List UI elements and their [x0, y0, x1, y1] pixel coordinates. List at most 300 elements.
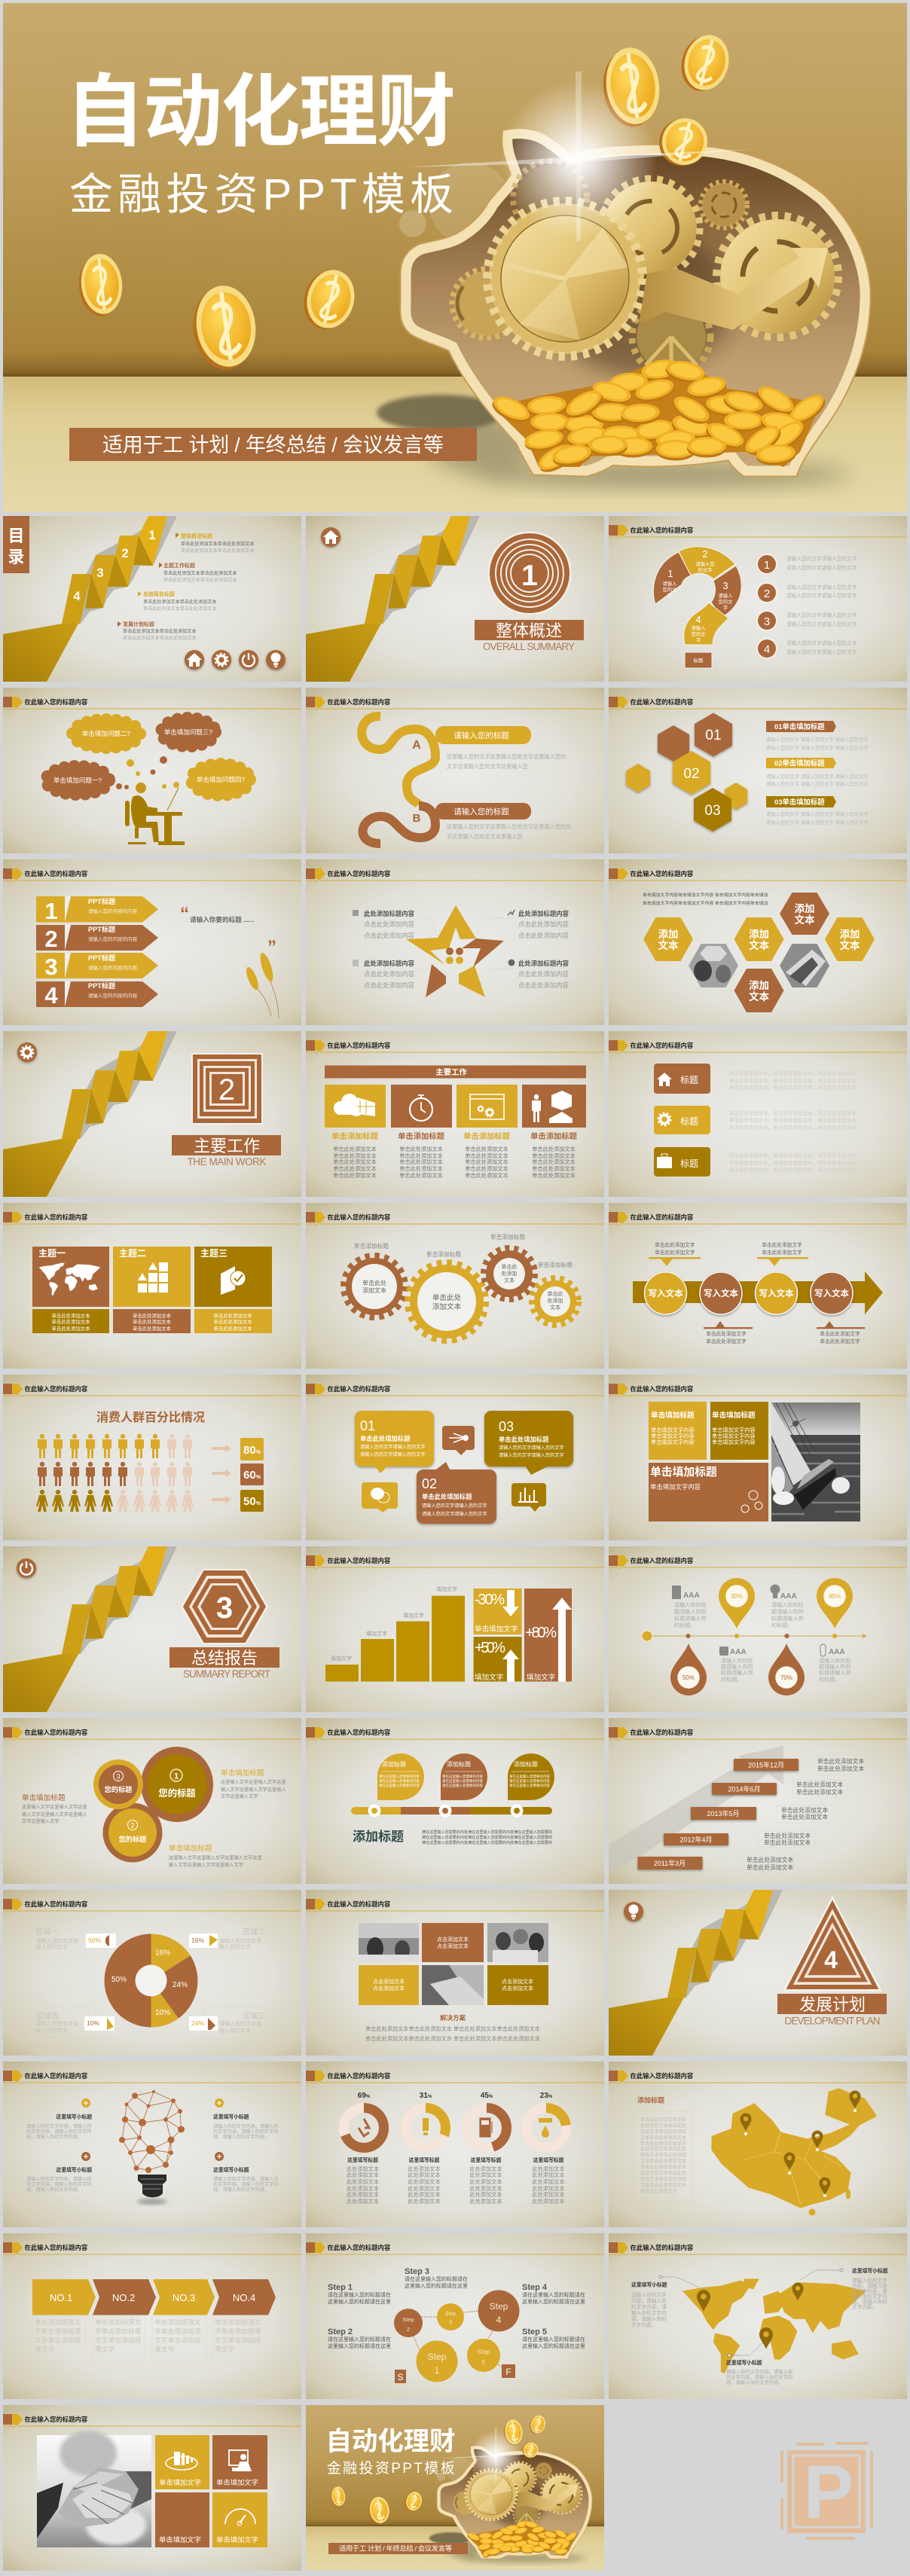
contents list: 单击此处添加文本单击此处添加文本	[181, 541, 255, 547]
panel: donut regions	[3, 1890, 301, 2056]
arrow list: 3	[44, 954, 58, 980]
tile text: 单击此处添加文本	[465, 1165, 508, 1172]
donut chart: 10%	[155, 2009, 170, 2017]
region texts: 请输入您的文字请	[36, 2020, 78, 2027]
bottom callouts: 单击此处添加文字	[820, 1330, 860, 1337]
left note: 这里填写小标题	[631, 2281, 667, 2288]
circle 3: 您的标题	[105, 1785, 132, 1793]
bubble 02: 单击此处填加标题	[422, 1493, 472, 1500]
step labels: 这里输入您的标题请在这里	[328, 2343, 391, 2349]
year notes: 单击此处添加文本	[796, 1781, 843, 1788]
tile titles: 单击添加标题	[530, 1131, 578, 1141]
solution text: 单击此处添加文本单击此处添加文本 单击此处添加文本单击此处添加文本	[365, 2035, 540, 2042]
tile text: 单击此处添加文本	[399, 1158, 443, 1165]
body text: 满在这里输入您需要的内容满在这里输入您需要的内容满在这里输入您需要的	[422, 1840, 552, 1845]
closing title: 自动化理财	[325, 2428, 455, 2456]
chevron text: 落文字	[35, 2345, 55, 2353]
solution heading: 解决方案	[440, 2014, 466, 2022]
percent cards: 24%	[191, 2019, 204, 2027]
text hexagons: 添加	[749, 980, 769, 991]
top callouts	[649, 1241, 808, 1266]
bottom note: 容。请输入你的文字内容。	[726, 2379, 783, 2385]
banner	[325, 1065, 586, 1079]
dark gold tile: 单击填加标题	[712, 1411, 756, 1420]
left items: 点击此处添加内容	[364, 932, 415, 939]
item bottom right: 请输入你的文字内容。请输入你	[213, 2176, 279, 2182]
hexagon cluster	[626, 713, 747, 832]
tile text: 单击此处添加文本	[333, 1146, 377, 1152]
AAA texts top: AAA	[780, 1592, 797, 1601]
numbered list: 请输入您的文字请输入您的文字	[786, 592, 857, 599]
region texts: 请输入您的文字请	[36, 1937, 78, 1944]
item top right	[213, 2098, 279, 2140]
panel: hexagon list: 在此输入您的标题内容	[630, 698, 694, 706]
right list: 请输入您的文字 请输入您的文字 请输入您的文字	[766, 780, 869, 787]
AAA texts top: 标题请输入你	[771, 1615, 804, 1622]
arrow list: 1	[44, 898, 58, 924]
panel: photo text tiles	[609, 1375, 907, 1540]
column text: 此处添加文本	[532, 2178, 565, 2185]
donut chart: 50%	[111, 1976, 127, 1984]
step labels: 请在这里输入您的标题请在	[522, 2291, 585, 2298]
item bottom right: 容。请输入你的文字内容。	[213, 2187, 269, 2193]
item bottom left: 容。请输入你的文字内容。	[26, 2187, 82, 2193]
percent boxes	[240, 1438, 264, 1512]
panel: section 1 overall summary	[306, 516, 604, 682]
heading: 添加标题	[353, 1830, 404, 1844]
tile: presenter: 单击填加文字	[216, 2478, 258, 2486]
nested triangle number: 4	[824, 1946, 838, 1973]
donut 31%: 31%	[420, 2092, 432, 2100]
drop dark gold	[508, 1753, 554, 1800]
english caption: OVERALL SUMMARY	[483, 641, 575, 652]
bar chart: 填加文字	[366, 1630, 387, 1637]
right items: 此处添加标题内容	[518, 960, 570, 967]
gear one: 单击此处	[362, 1279, 386, 1286]
right list: 02单击填加标题	[774, 759, 825, 767]
gear labels: 单击添加标题	[538, 1261, 573, 1268]
donut 23%: 23%	[540, 2092, 553, 2100]
panel: three buttons list	[609, 1031, 907, 1197]
chevron text: 文字单击添加段	[95, 2336, 142, 2344]
map text box: 单击此处添加文本	[640, 2188, 677, 2194]
contents tab: 目	[8, 526, 25, 545]
photo: meeting two	[487, 1923, 548, 1962]
AAA texts top: 标题请输入你	[674, 1615, 707, 1622]
right items	[508, 910, 570, 989]
bullet text: 单击此处添加文本，单击此处添加文本，单击此处添加文本	[729, 1084, 857, 1091]
theme two: 单击此处添加文本	[133, 1318, 172, 1325]
donut 69%: 69%	[358, 2092, 371, 2100]
circles: 写入文本	[759, 1288, 794, 1299]
tile: dark gold: 点击添加文本	[502, 1978, 533, 1985]
quote	[180, 904, 276, 957]
gear three: 文本	[504, 1277, 515, 1283]
column text: 此处添加文本	[469, 2172, 502, 2178]
column titles: 这里填写标题	[409, 2156, 440, 2163]
section heading band	[169, 1647, 279, 1668]
tile +50%: 填加文字	[475, 1673, 503, 1682]
dark gold tile	[710, 1402, 768, 1460]
text hexagons: 文本	[749, 939, 769, 951]
panel: year staircase timeline	[609, 1718, 907, 1884]
year notes: 单击此处添加文本	[817, 1757, 864, 1765]
right text: 文字这里输入文字	[221, 1793, 258, 1799]
right note	[852, 2267, 888, 2310]
donut 69%	[344, 2092, 384, 2148]
item top left: 请输入你的文字内容。请输入你	[26, 2123, 92, 2129]
panel: question mark diagram: 在此输入您的标题内容	[630, 526, 694, 534]
left text: 单击填加标题	[22, 1793, 66, 1802]
region texts: 输入您的文字	[219, 1943, 251, 1950]
nested hexagon number	[181, 1569, 268, 1644]
left note: 的文字内容。请	[631, 2303, 667, 2310]
numbered list: 请输入您的文字请输入您的文字	[786, 649, 857, 655]
right list: 请输入您的文字 请输入您的文字 请输入您的文字	[766, 810, 869, 817]
top callouts: 单击此处添加文字	[655, 1241, 695, 1248]
contents list: 整体概述标题	[181, 533, 212, 539]
step labels: 这里输入您的标题请在这里	[328, 2298, 391, 2305]
theme one: 单击此处添加文本	[51, 1312, 90, 1319]
year notes: 单击此处添加文本	[817, 1765, 864, 1772]
panel: chevron steps	[3, 2233, 301, 2399]
tile: gold: 点击添加文本	[373, 1978, 405, 1985]
tile text: 单击此处添加文本	[333, 1158, 377, 1165]
percent cards: 16%	[191, 1937, 204, 1944]
bar chart: 填加文字	[436, 1586, 457, 1592]
arrow list: 2	[44, 926, 58, 952]
tile: dark gold: 点击添加文本	[502, 1985, 533, 1992]
column text: 此处添加文本	[347, 2185, 379, 2192]
contents list: 单击此处添加文本单击此处添加文本	[123, 635, 196, 641]
panel: section 4 development plan	[609, 1890, 907, 2056]
panel: consumer percentage	[3, 1375, 301, 1540]
question mark chart: 请输入您	[695, 560, 715, 567]
nested triangle number	[783, 1896, 882, 1992]
people row 60%	[38, 1462, 192, 1486]
panel: network bulb: 在此输入您的标题内容	[24, 2072, 88, 2080]
buttons: 标题	[680, 1116, 698, 1127]
circle 2	[102, 1803, 163, 1862]
tile text: 单击此处添加文本	[465, 1158, 508, 1165]
tile: gauge	[212, 2492, 267, 2547]
year notes: 单击此处添加文本	[764, 1832, 811, 1839]
S and F boxes: S	[397, 2372, 404, 2382]
chevron text: 字单击添加段落	[95, 2327, 142, 2335]
tile titles: 单击添加标题	[398, 1131, 445, 1141]
bubble 02	[417, 1462, 496, 1524]
right note: 输入你的文字内	[852, 2293, 887, 2300]
circles: 写入文本	[814, 1288, 849, 1299]
body text	[422, 1830, 552, 1845]
icon: bulb	[624, 1902, 643, 1921]
numbered list: 请输入您的文字请输入您的文字	[786, 612, 857, 618]
dark gold tile: 单击填加文字内容	[712, 1427, 756, 1433]
circle 2: 您的标题	[119, 1835, 146, 1843]
bar chart	[325, 1586, 465, 1682]
panel: arrow timeline: 在此输入您的标题内容	[630, 1213, 694, 1221]
tile +80%: 填加文字	[527, 1673, 555, 1682]
watermark stamp	[782, 2443, 872, 2538]
percent boxes: 50%	[243, 1495, 261, 1508]
clouds: 单击填加问题四?	[197, 776, 245, 783]
column text: 此处添加文本	[532, 2198, 565, 2205]
arrow band	[633, 1271, 883, 1314]
panel: hero cover	[3, 3, 907, 512]
gold tile: 单击填加文字内容	[651, 1439, 695, 1445]
column text: 此处添加文本	[347, 2178, 379, 2185]
star leader lines	[419, 918, 515, 969]
chevrons: NO.3	[173, 2292, 195, 2303]
column text	[347, 2165, 565, 2205]
panel: step network: 在此输入您的标题内容	[327, 2244, 391, 2251]
step labels: 请在这里输入您的标题请在	[328, 2291, 391, 2298]
english caption: THE MAIN WORK	[187, 1156, 267, 1167]
AAA texts top: 请输入你的标	[674, 1601, 707, 1608]
chevron text: 文字单击添加段	[35, 2336, 81, 2344]
stair numbers: 4	[73, 589, 81, 603]
arrow list: 4	[44, 982, 58, 1009]
gold tile: 单击填加标题	[651, 1411, 695, 1420]
panel: hexagon list	[609, 688, 907, 853]
tile +50%: +50%	[475, 1640, 505, 1656]
chevron text: 落文字	[154, 2345, 175, 2353]
clouds	[46, 718, 250, 795]
panel: A B title flow: 在此输入您的标题内容	[327, 698, 391, 706]
panel: donut regions: 在此输入您的标题内容	[24, 1900, 88, 1908]
item top right: 容。请输入你的文字内容。	[213, 2134, 269, 2140]
panel: star diagram	[306, 859, 604, 1025]
item top right: 的文字内容。请输入你的文字内	[213, 2129, 279, 2135]
donut chart: 24%	[173, 1981, 188, 1989]
chevron text: 字单击添加段落	[215, 2327, 261, 2335]
AAA texts top: 题请输入你的	[674, 1608, 707, 1615]
right list: 请输入您的文字 请输入您的文字 请输入您的文字	[766, 736, 869, 743]
theme one: 主题一	[38, 1247, 66, 1259]
tagline band: 适用于工 计划 / 年终总结 / 会议发言等	[102, 434, 444, 456]
chevron text	[32, 2316, 266, 2362]
arrow list	[36, 896, 158, 1009]
map text box	[634, 2111, 692, 2201]
bubble 01: 请输入您的文字请输入您的文字	[360, 1444, 426, 1450]
buttons: 标题	[680, 1075, 698, 1085]
AAA texts bottom: 请输入你的标	[721, 1657, 753, 1664]
banner: 主要工作	[435, 1067, 467, 1077]
chart title: 消费人群百分比情况	[96, 1410, 205, 1424]
bottom callouts	[704, 1321, 865, 1344]
AAA texts bottom: AAA	[829, 1648, 845, 1656]
numbered list: 2	[764, 588, 770, 600]
step nodes: Step	[478, 2349, 490, 2355]
people row 80%	[38, 1434, 192, 1458]
pins up: 30%	[731, 1593, 743, 1600]
item top right: 这里填写小标题	[213, 2114, 249, 2120]
right items: 点击此处添加内容	[518, 981, 570, 989]
region texts: 输入您的文字	[219, 2027, 251, 2034]
panel: three themes	[3, 1203, 301, 1369]
AAA texts bottom: AAA	[730, 1648, 747, 1656]
stair numbers: 3	[96, 566, 104, 580]
panel: photo text tiles: 在此输入您的标题内容	[630, 1385, 694, 1393]
tile text: 单击此处添加文本	[465, 1152, 508, 1159]
panel: thought clouds	[3, 688, 301, 853]
panel: network bulb	[3, 2062, 301, 2227]
chevron text: 文字单击添加段	[215, 2336, 261, 2344]
column titles: 这里填写标题	[347, 2156, 378, 2163]
drop gold	[377, 1753, 424, 1800]
tile -30%: -30%	[475, 1592, 505, 1608]
theme two: 单击此处添加文本	[133, 1312, 172, 1319]
panel: hexagons with photos: 在此输入您的标题内容	[630, 870, 694, 877]
right note: 内容。请输入你	[852, 2282, 887, 2289]
right items: 点击此处添加内容	[518, 970, 570, 978]
right items: 点击此处添加内容	[518, 932, 570, 939]
nested squares number: 2	[218, 1073, 235, 1106]
item bottom left: 这里填写小标题	[56, 2166, 92, 2173]
tile text: 单击此处添加文本	[333, 1172, 377, 1179]
english caption: SUMMARY REPORT	[183, 1668, 270, 1680]
icon bubble chat	[362, 1482, 398, 1512]
bullet text: 单击此处添加文本，单击此处添加文本，单击此处添加文本	[729, 1109, 857, 1116]
lower text: 输入文字这里输入文字这里输入文字	[169, 1862, 243, 1868]
left note: 请输入你的文字	[631, 2291, 667, 2298]
top callouts: 单击此处添加文字	[762, 1241, 802, 1248]
gear four	[532, 1278, 579, 1325]
year labels: 2014年6月	[728, 1785, 761, 1793]
panel: main work four tiles	[306, 1031, 604, 1197]
left items	[353, 910, 415, 989]
person at desk	[125, 783, 185, 845]
percent cards	[84, 1934, 218, 2031]
tile text: 单击此处添加文本	[532, 1165, 576, 1172]
theme three: 单击此处添加文本	[213, 1325, 252, 1332]
chevrons: NO.4	[233, 2292, 255, 2303]
lower text	[169, 1844, 262, 1868]
bubble 03: 03	[499, 1419, 514, 1434]
gear three: 处添加	[502, 1270, 517, 1277]
panel: thought clouds: 在此输入您的标题内容	[24, 698, 88, 706]
item top left: 这里填写小标题	[56, 2114, 92, 2120]
chevron text: 单击添加段落文	[215, 2318, 261, 2326]
question mark chart: 您的文	[692, 630, 706, 637]
theme three	[194, 1247, 272, 1333]
tile -30%: 单击填加文字	[475, 1625, 518, 1634]
donut 23%	[526, 2092, 566, 2148]
tile titles: 单击添加标题	[463, 1131, 511, 1141]
icon: network bulb	[119, 2090, 185, 2204]
step labels	[328, 2267, 585, 2349]
step nodes: 3	[449, 2320, 452, 2325]
body text: 字这里输入您的文字这里输入您	[447, 833, 523, 840]
gear two	[408, 1262, 486, 1341]
bullet text: 单击此处添加文本，单击此处添加文本，单击此处添加文本	[729, 1070, 857, 1076]
tile: building	[155, 2435, 209, 2489]
tile text: 单击此处添加文本	[399, 1172, 443, 1179]
percent cards: 50%	[88, 1937, 101, 1944]
map pins	[740, 2091, 860, 2197]
step nodes: 4	[496, 2315, 502, 2325]
map text box: 文本单击此处添加文本	[640, 2182, 686, 2188]
AAA texts top	[672, 1585, 804, 1628]
chevron text: 单击添加段落文	[95, 2318, 142, 2326]
buttons	[654, 1064, 710, 1177]
top callouts: 单击此处添加文字	[762, 1249, 802, 1256]
nested squares number	[191, 1053, 263, 1125]
chevrons: NO.2	[112, 2292, 135, 2303]
right items: 此处添加标题内容	[518, 910, 570, 917]
gear two: 单击此处	[432, 1293, 462, 1302]
bar chart: 填加文字	[403, 1612, 424, 1619]
chevron text: 字单击添加段落	[35, 2327, 81, 2335]
map of china	[713, 2089, 875, 2214]
column text: 此处添加文本	[469, 2185, 502, 2192]
tile: window	[457, 1085, 518, 1128]
panel: question mark diagram	[609, 516, 907, 682]
circle 1	[141, 1747, 213, 1822]
contents list	[118, 533, 255, 641]
bubble 01: 请输入您的文字请输入您的文字	[360, 1451, 426, 1457]
tagline band	[69, 428, 477, 461]
item bottom left: 请输入你的文字内容。请输入你	[26, 2176, 92, 2182]
bubble 03: 请输入您的文字请输入您的文字	[499, 1445, 564, 1451]
top callouts: 单击此处添加文字	[655, 1249, 695, 1256]
panel: section 2 main work	[3, 1031, 301, 1197]
dark gold tile: 单击填加文字内容	[712, 1433, 756, 1439]
chevron text: 落文字	[95, 2345, 115, 2353]
tile: stopwatch	[391, 1085, 452, 1128]
step nodes: 2	[407, 2326, 410, 2333]
tile: blank	[155, 2492, 209, 2547]
step nodes: Step	[402, 2316, 414, 2323]
brown tile: 单击填加文字内容	[650, 1483, 701, 1491]
photo: handshake	[37, 2431, 151, 2547]
numbered list: 请输入您的文字请输入您的文字	[786, 639, 857, 646]
numbered list: 请输入您的文字请输入您的文字	[786, 584, 857, 591]
map heading: 添加标题	[637, 2095, 664, 2104]
right items: 点击此处添加内容	[518, 920, 570, 928]
hexagon numbers: 02	[683, 766, 700, 782]
panel: four donut meters: 在此输入您的标题内容	[327, 2072, 391, 2080]
drop dark gold: 请在这里输入您需要的内容	[509, 1774, 550, 1779]
column text: 此处添加文本	[408, 2172, 441, 2178]
numbered list: 请输入您的文字请输入您的文字	[786, 555, 857, 562]
icon bubble bars	[511, 1483, 546, 1512]
tile titles	[331, 1131, 578, 1141]
year notes: 单击此处添加文本	[781, 1806, 828, 1814]
AAA texts bottom: 标题请输入你	[721, 1669, 753, 1676]
step labels: Step 2	[328, 2327, 353, 2336]
theme one: 单击此处添加文本	[51, 1325, 90, 1332]
year labels: 2011年3月	[654, 1859, 686, 1867]
pins up	[719, 1578, 853, 1628]
right text: 这里输入文字这里输入文字这里	[221, 1779, 286, 1785]
map text box: 此处添加文本单击此处	[640, 2170, 686, 2176]
item bottom left	[26, 2152, 92, 2193]
bottom callouts: 单击此处添加文字	[706, 1338, 747, 1344]
stair graphic	[3, 516, 177, 682]
item top left	[26, 2098, 92, 2140]
step nodes: Step	[490, 2301, 508, 2312]
bubble 03	[484, 1411, 573, 1475]
question mark chart: 请输入	[663, 580, 677, 587]
chevrons	[32, 2279, 276, 2315]
english caption: DEVELOPMENT PLAN	[785, 2016, 880, 2026]
closing artwork	[306, 2405, 604, 2571]
text hexagons: 文本	[658, 939, 679, 951]
right note: 文字内容。	[852, 2303, 877, 2310]
contents list: 单击此处添加文本单击此处添加文本	[181, 548, 255, 554]
bubble 03: 单击此处填加标题	[499, 1436, 549, 1443]
